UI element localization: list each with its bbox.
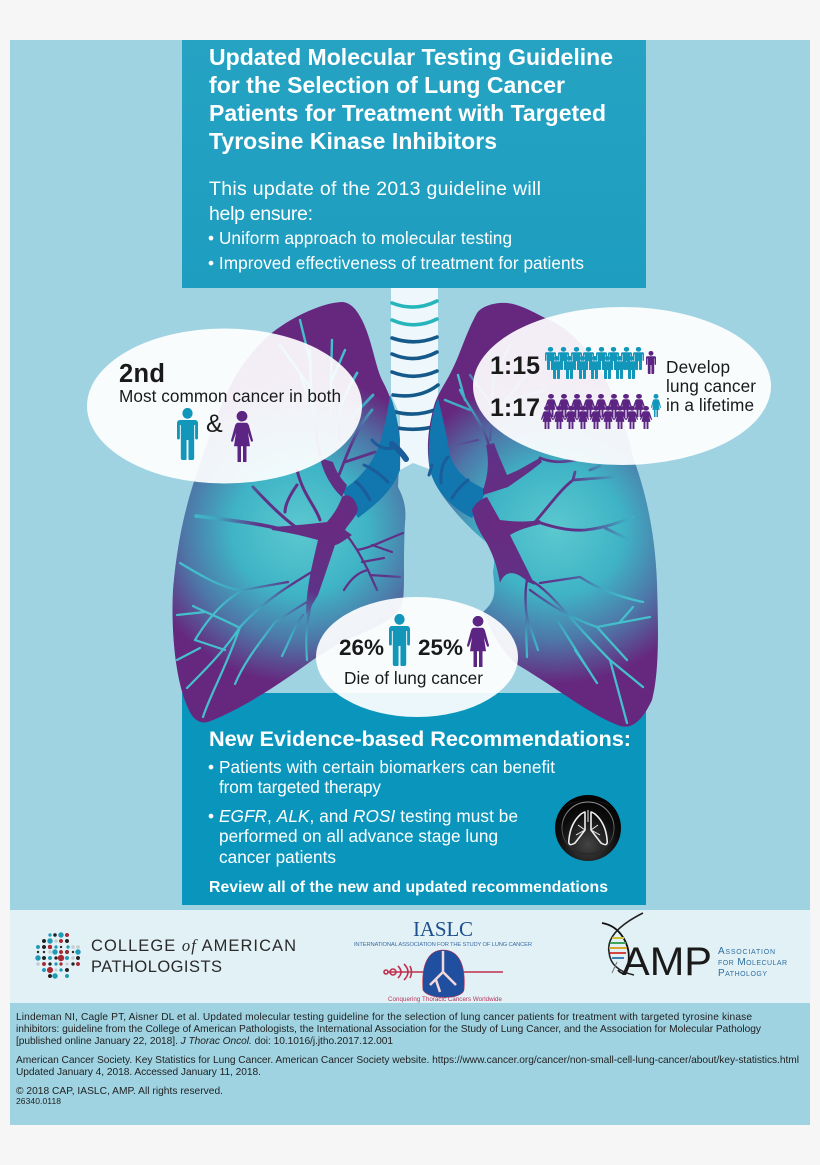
- heading: 2nd: 2nd: [119, 360, 165, 388]
- title: Patients for Treatment with Targeted: [209, 100, 606, 126]
- logo wordmark: PATHOLOGISTS: [91, 958, 222, 976]
- logo: IASLC: INTERNATIONAL ASSOCIATION FOR THE STUDY OF LUNG CANCER: [354, 942, 532, 948]
- citation: American Cancer Society: Updated January 4, 2018. Accessed January 11, 2018.: [16, 1067, 261, 1078]
- logo: AMP: [602, 913, 787, 984]
- logo: AMP: Association: [718, 946, 775, 957]
- title: Updated Molecular Testing Guideline: [209, 44, 613, 70]
- right bronchus: [429, 398, 487, 518]
- text: most common cancer: Most common cancer in both: [119, 386, 341, 406]
- left airway rings: [356, 440, 406, 500]
- icon: woman: [467, 616, 489, 667]
- callout: die of lung cancer: [316, 597, 518, 717]
- recommendations text: [208, 726, 631, 896]
- logo: AMP: AMP: [622, 940, 712, 984]
- top header panel: [182, 40, 646, 288]
- logo wordmark: COLLEGE of AMERICAN: [91, 936, 296, 955]
- ratio men: 1:15: [490, 352, 540, 380]
- left bronchus: [342, 395, 400, 518]
- text: develop lung cancer: lung cancer: [666, 376, 756, 396]
- logo: AMP: for Molecular: [718, 957, 787, 968]
- citation: American Cancer Society: American Cancer Society. Key Statistics for Lung Cancer. American Cancer Society website. https://www.cancer.org/cancer/non-small-cell-lung-cancer/about/key-statistics.html: [16, 1055, 799, 1066]
- intro text: • Uniform approach to molecular testing: [208, 228, 512, 248]
- title: [209, 44, 613, 154]
- text: die of lung cancer: Die of lung cancer: [344, 668, 483, 688]
- citation: American Cancer Society: [16, 1055, 799, 1078]
- intro text: This update of the 2013 guideline will: [209, 178, 541, 200]
- bullet: biomarkers: • Patients with certain biomarkers can benefit: [208, 757, 555, 777]
- right bronchial tree: [445, 345, 650, 723]
- bullet: testing: • EGFR, ALK, and ROSI testing must be: [208, 806, 518, 826]
- pictogram: women row: [541, 394, 661, 429]
- intro text: help ensure:: [209, 203, 313, 225]
- logo: IASLC: Conquering Thoracic Cancers Worldwide: [388, 996, 503, 1003]
- bullet: testing: cancer patients: [219, 847, 336, 867]
- logo: AMP: Pathology: [718, 968, 767, 979]
- logo: IASLC: IASLC: [413, 917, 473, 941]
- intro text: • Improved effectiveness of treatment for patients: [208, 253, 584, 273]
- right airway rings: [429, 457, 468, 498]
- logo wordmark: [91, 936, 296, 976]
- copyright: © 2018 CAP, IASLC, AMP. All rights reserved.: [16, 1086, 223, 1097]
- ampersand: &: [206, 410, 223, 438]
- citation: guideline: [16, 1012, 762, 1047]
- callout: lifetime risk: [473, 307, 771, 465]
- sword and lung emblem: [384, 950, 503, 998]
- footer references: [16, 1012, 799, 1106]
- citation: guideline: [published online January 22, 2018]. J Thorac Oncol. doi: 10.1016/j.jtho.2017.12.001: [16, 1036, 393, 1047]
- right lung: [428, 303, 658, 727]
- text: develop lung cancer: in a lifetime: [666, 395, 754, 415]
- document number: 26340.0118: [16, 1096, 61, 1106]
- pictogram: men row: [545, 347, 656, 379]
- percent men: 26%: [339, 635, 384, 660]
- icon: man: [177, 408, 198, 460]
- icon: man: [389, 614, 410, 666]
- icon: woman: [231, 411, 253, 462]
- bullet: biomarkers: from targeted therapy: [219, 777, 381, 797]
- ratio women: 1:17: [490, 394, 540, 422]
- left lung: [173, 302, 406, 722]
- bullet: testing: [208, 806, 518, 867]
- DNA helix: [602, 913, 643, 975]
- citation: guideline: Lindeman NI, Cagle PT, Aisner DL et al. Updated molecular testing guideline for the selection of lung cancer patients for treatment with targeted tyrosine kinase: [16, 1012, 752, 1023]
- left bronchial tree: [177, 320, 403, 717]
- logo: College of American Pathologists: [36, 932, 296, 978]
- heading: recommendations: New Evidence-based Recommendations:: [209, 726, 631, 751]
- text: develop lung cancer: [666, 357, 756, 415]
- title: for the Selection of Lung Cancer: [209, 72, 565, 98]
- callout: 2nd most common cancer: [87, 328, 362, 484]
- intro text: [208, 178, 584, 273]
- text: develop lung cancer: Develop: [666, 357, 730, 377]
- percent women: 25%: [418, 635, 463, 660]
- logo strip background: [10, 910, 810, 1003]
- review link: Review all of the new and updated recommendations: [209, 879, 608, 896]
- bullet: biomarkers: [208, 757, 555, 797]
- logo mark dots: [36, 932, 80, 978]
- citation: guideline: inhibitors: guideline from the College of American Pathologists, the International Association for the Study of Lung Cancer, and the Association for Molecular Pathology: [16, 1024, 762, 1035]
- title: Tyrosine Kinase Inhibitors: [209, 128, 497, 154]
- logo: IASLC: [354, 917, 532, 1003]
- bullet: testing: performed on all advance stage lung: [219, 826, 498, 846]
- trachea: [391, 288, 438, 470]
- bottom recommendations panel background: [182, 693, 646, 905]
- icon: lung button: [555, 795, 621, 861]
